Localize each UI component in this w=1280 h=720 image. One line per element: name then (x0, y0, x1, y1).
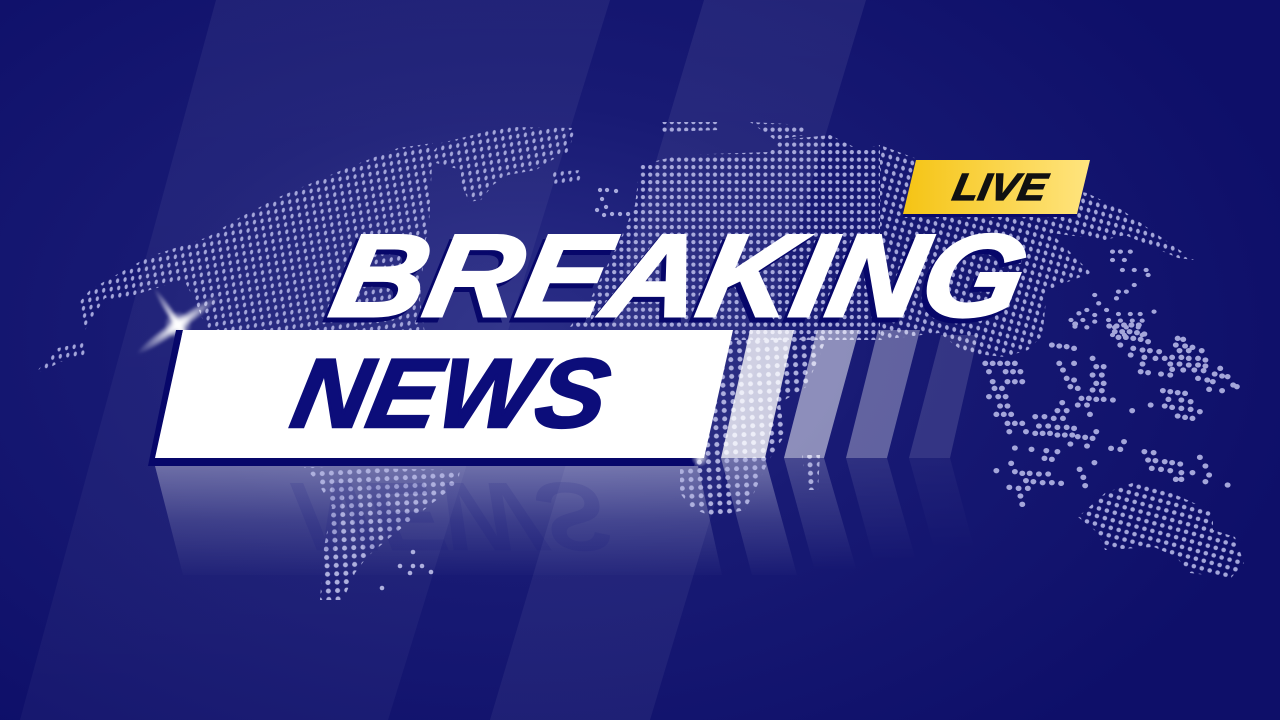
sparkle on panel corner (133, 285, 223, 365)
map: Greenland (425, 127, 582, 202)
panel white bar (155, 330, 733, 458)
map: East Asia scattered dots (1071, 252, 1154, 335)
corner glint (691, 449, 709, 467)
reflection: panel and stripes (155, 458, 980, 575)
reflection: NEWS text: NEWS (284, 462, 618, 572)
map: Africa (680, 335, 828, 517)
LIVE badge (903, 160, 1090, 217)
badge gold panel (903, 160, 1090, 214)
BREAKING shadow: BREAKING (317, 216, 1032, 347)
panel shadow (148, 330, 697, 466)
map: Australia (1078, 482, 1244, 578)
BREAKING text: BREAKING (322, 211, 1037, 342)
BREAKING headline (317, 211, 1037, 347)
map: Europe and Asia (560, 122, 1194, 357)
diagonal light beams (20, 0, 866, 720)
NEWS text: NEWS (284, 338, 618, 448)
LIVE text: LIVE (949, 166, 1052, 209)
map: North America (36, 143, 433, 372)
map: South America (304, 467, 460, 600)
dotted world map (36, 122, 1244, 600)
map: Europe scattered dots (597, 190, 628, 215)
map: Africa east dots (802, 455, 820, 490)
fading stripes (721, 330, 978, 458)
map: South Asia and the Pacific dots (985, 324, 1237, 504)
NEWS panel (148, 330, 733, 467)
badge shadow (903, 163, 1089, 217)
